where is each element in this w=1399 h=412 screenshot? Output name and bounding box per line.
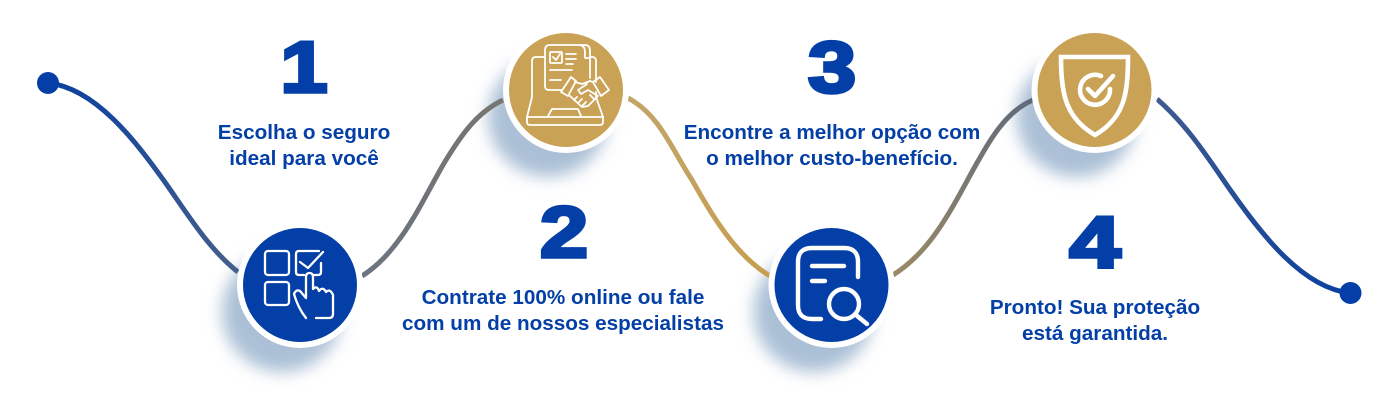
step 2 number: 2 bbox=[540, 193, 588, 273]
step 4 text: Pronto! Sua proteção bbox=[990, 296, 1200, 319]
icon 3: document with magnifier bbox=[768, 222, 894, 348]
icon 2: contract on laptop with handshake bbox=[503, 27, 629, 153]
step 3 text: o melhor custo-benefício. bbox=[706, 147, 958, 170]
step 3 text: Encontre a melhor opção com bbox=[684, 121, 980, 144]
step 1 text: Escolha o seguro bbox=[218, 121, 390, 144]
step 2 text bbox=[402, 286, 724, 335]
start dot bbox=[37, 72, 59, 94]
end dot bbox=[1340, 282, 1362, 304]
step 3 number: 3 bbox=[808, 28, 856, 108]
circle shadows bbox=[222, 57, 1136, 372]
icon 1: checklist with pointing hand bbox=[237, 222, 363, 348]
step 3 text bbox=[684, 121, 980, 170]
step 1 text: ideal para você bbox=[229, 147, 379, 170]
wave line bbox=[48, 83, 1350, 293]
step 4 text bbox=[990, 296, 1200, 345]
step 4 number: 4 bbox=[1069, 203, 1121, 283]
step 1 text bbox=[218, 121, 390, 170]
step 2 text: Contrate 100% online ou fale bbox=[422, 286, 704, 309]
step 1 number: 1 bbox=[280, 28, 328, 108]
icon 4: shield with check bbox=[1032, 27, 1158, 153]
step 4 text: está garantida. bbox=[1022, 322, 1168, 345]
step 2 text: com um de nossos especialistas bbox=[402, 312, 724, 335]
